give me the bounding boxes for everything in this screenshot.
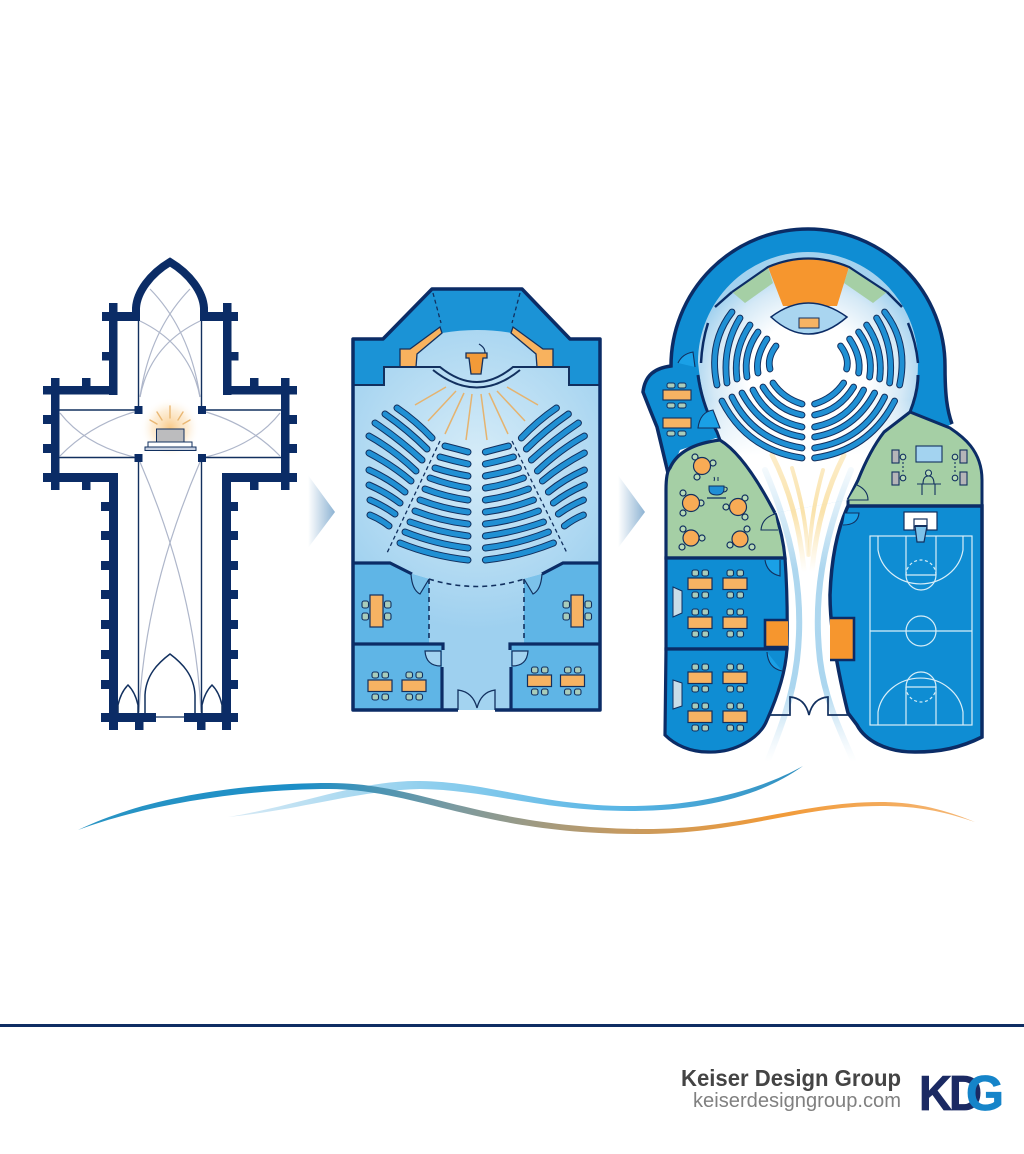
main doors	[458, 690, 495, 714]
media room equipment	[892, 446, 967, 495]
logo: KDG: G	[966, 1067, 1004, 1121]
meeting tables	[362, 595, 592, 700]
wing doors	[843, 485, 868, 525]
swoosh: blue to orange	[78, 783, 975, 834]
basketball hoop	[904, 512, 937, 542]
classroom whiteboards	[673, 587, 682, 709]
blue dome ring and north room	[643, 229, 952, 473]
outer dome outline	[643, 229, 952, 473]
footer brand text	[681, 1065, 901, 1112]
central entrance doors	[770, 697, 848, 715]
cross walls	[43, 262, 297, 730]
footer brand text: Keiser Design Group	[681, 1065, 901, 1091]
classroom B	[665, 649, 787, 752]
north room doors	[678, 352, 720, 428]
classroom doors	[765, 560, 782, 671]
footer brand text: keiserdesigngroup.com	[693, 1090, 901, 1112]
logo: KDG	[919, 1067, 1004, 1121]
sanctuary funnel	[698, 252, 918, 513]
dashed aisle lines	[387, 293, 567, 553]
arrow: auditorium to campus	[618, 475, 645, 548]
main hall and corridor	[353, 330, 600, 710]
dome seating right	[815, 312, 902, 458]
centre seating right	[485, 446, 553, 560]
north room tables	[663, 383, 691, 436]
funnel edge lines	[698, 375, 918, 513]
inner column lines	[59, 321, 281, 717]
cafe door	[761, 514, 778, 530]
side seating left	[369, 408, 432, 526]
arrow: cathedral to auditorium	[308, 475, 335, 548]
dashed lobby lines	[429, 579, 524, 642]
sound rays	[415, 387, 538, 440]
side rooms fill	[353, 563, 600, 710]
centre seating left	[400, 446, 468, 560]
orange storage left	[765, 620, 788, 647]
lectern	[466, 344, 487, 374]
dome seating left	[715, 312, 802, 458]
crossing piers	[134, 406, 206, 462]
icon: coffee cup	[707, 477, 727, 498]
panel: cathedral cross plan	[43, 262, 297, 730]
dome arc segments	[701, 292, 918, 363]
side seating right	[521, 408, 584, 526]
light streams	[765, 455, 853, 760]
classroom tables	[688, 570, 747, 731]
logo: KDG: D	[949, 1067, 982, 1121]
orange chancel	[768, 258, 849, 306]
panel: auditorium plan	[353, 289, 600, 714]
swoosh: light blue	[228, 766, 803, 817]
hall and room doors	[411, 574, 542, 666]
green media room	[848, 412, 982, 506]
footer rule	[0, 1024, 1024, 1027]
panel: modern campus plan	[643, 229, 982, 760]
cafe tables	[679, 454, 755, 550]
interior walls	[353, 563, 600, 710]
classroom A	[666, 558, 787, 649]
eye shaped stage	[771, 303, 847, 334]
balcony green segments	[732, 268, 887, 303]
basketball court	[870, 536, 972, 725]
entrance arches	[118, 654, 222, 713]
green cafe room	[666, 440, 785, 558]
building outline	[353, 289, 600, 710]
chancel top line	[732, 258, 887, 292]
right gym wing	[830, 506, 982, 752]
stage edge arcs	[353, 367, 600, 388]
orange storage right	[830, 618, 854, 660]
logo: KDG: K	[919, 1067, 952, 1121]
altar with glow	[140, 398, 200, 458]
orange stage wings	[400, 327, 553, 367]
building shell	[353, 289, 600, 710]
vaulting ribs	[60, 289, 280, 712]
